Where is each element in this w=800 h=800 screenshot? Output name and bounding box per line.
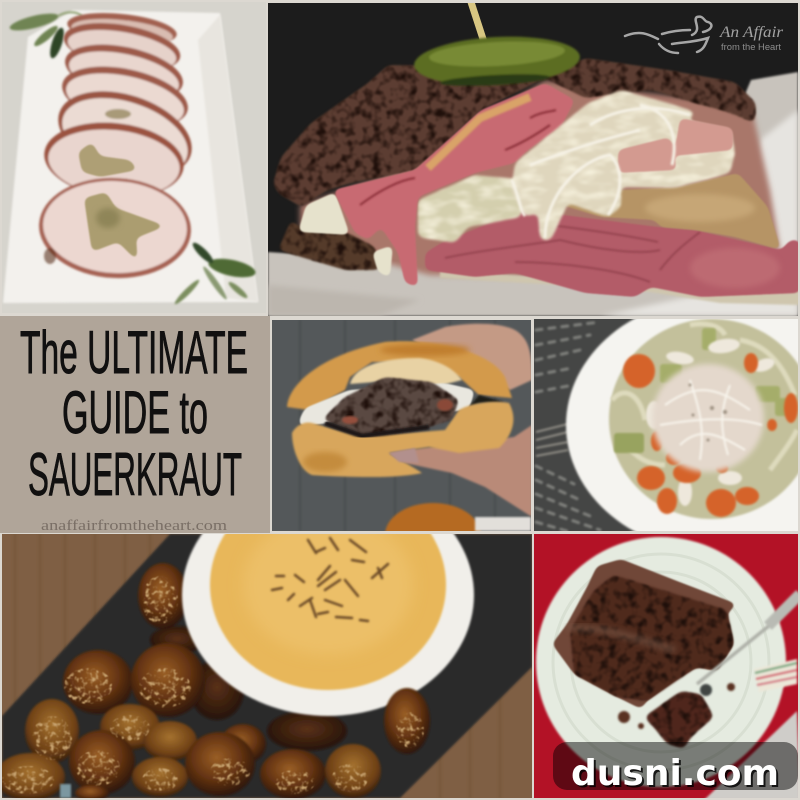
white plate: [536, 537, 786, 787]
top bun: [287, 341, 512, 410]
bottom corned beef: [425, 210, 800, 297]
hand: [389, 324, 532, 517]
beer cheese: [210, 480, 446, 690]
crumbs: [618, 683, 735, 729]
dark slit: [469, 395, 504, 407]
chicken pieces: [646, 337, 776, 506]
pickle: [413, 33, 581, 89]
caraway seeds: [272, 538, 388, 621]
crust under meat: [440, 270, 800, 305]
celery: [614, 328, 789, 453]
bottom rye bread: [278, 220, 381, 270]
herb sprig bottom: [173, 240, 257, 306]
upper sauerkraut: [511, 90, 735, 240]
title: The ULTIMATE GUIDE to SAUERKRAUT: SAUERKRAUT: [28, 441, 242, 508]
orange bun below: [384, 502, 482, 531]
cake bite: [644, 691, 714, 749]
pretzel salt: [2, 534, 532, 798]
watermark: dusni.com: dusni.com: [571, 753, 779, 794]
watermark: dusni.com: [553, 742, 798, 796]
broth: [609, 319, 800, 519]
marble table: [268, 72, 798, 316]
title: The ULTIMATE GUIDE to SAUERKRAUT: [20, 319, 248, 508]
pork slices: [36, 8, 203, 282]
sandwich filling underlay: [300, 80, 780, 280]
cake crumb: [570, 575, 734, 701]
mustard strip: [428, 97, 530, 168]
panel: reuben sandwich photo: [268, 2, 800, 316]
panel: title card: [0, 316, 270, 534]
title: The ULTIMATE GUIDE to SAUERKRAUT: GUIDE to: [62, 379, 208, 446]
white bowl: [564, 319, 798, 531]
panel: black bean burger photo: [272, 320, 531, 531]
pretzel bites: [0, 643, 430, 800]
logo: An Affair from the Heart: An Affair: [719, 24, 784, 41]
toothpick: [471, 2, 484, 42]
black slate board: [2, 534, 532, 798]
cake slice frosting: [552, 559, 737, 709]
meat inside sauerkraut: [618, 118, 733, 173]
bottom bun: [292, 402, 513, 477]
thumb nail: [389, 448, 419, 463]
watermark: dusni.com: dusni.com: [573, 755, 781, 796]
lower sauerkraut: [418, 175, 528, 243]
white sauce: [299, 383, 475, 427]
logo: An Affair from the Heart: [625, 17, 784, 53]
white bowl: [182, 474, 474, 716]
website url: anaffairfromtheheart.com: [41, 518, 227, 534]
panel: chicken noodle soup photo: [534, 319, 798, 531]
stuffing: [78, 144, 160, 258]
top corned beef: [333, 83, 575, 287]
carrots: [623, 353, 798, 517]
fork: [697, 594, 800, 696]
top rye bread: [273, 58, 756, 207]
swiss cheese: [298, 192, 393, 278]
pretzel bites behind bowl: [138, 563, 347, 751]
panel: chocolate sauerkraut cake photo: [534, 534, 800, 800]
white platter: [3, 10, 258, 303]
panel: soft pretzels with beer cheese photo: [2, 534, 532, 798]
title: The ULTIMATE GUIDE to SAUERKRAUT: The ULTIMATE: [20, 319, 248, 386]
herb sprig top: [8, 10, 82, 60]
toasted bread slice: [555, 173, 781, 250]
striped napkin: [754, 659, 797, 692]
blue plate peek: [60, 784, 71, 798]
logo: An Affair from the Heart: from the Heart: [721, 42, 782, 52]
black bean patty: [322, 377, 459, 437]
sauerkraut pile: [652, 364, 764, 472]
panel: stuffed pork roast photo: [2, 2, 266, 313]
white cloth corner: [704, 711, 800, 800]
